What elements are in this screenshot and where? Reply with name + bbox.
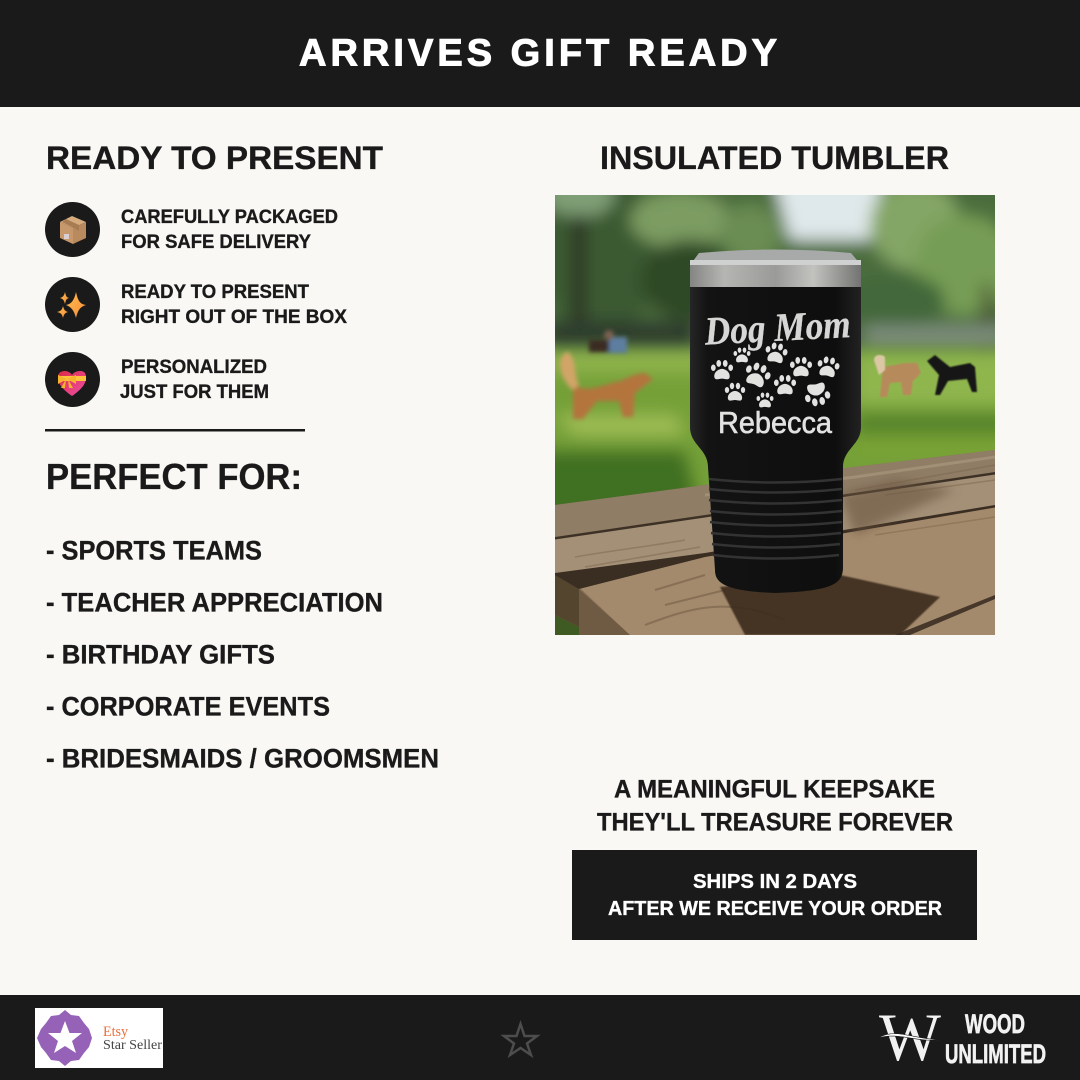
benefit: carefully packaged: [45, 202, 338, 257]
logo: wood unlimited: WOOD: [965, 1009, 1025, 1039]
callout: shipping box: [572, 850, 977, 940]
benefit: carefully packaged: CAREFULLY PACKAGED: [121, 206, 338, 228]
list: occasions: [46, 536, 439, 774]
benefit: ready to present: [45, 277, 347, 332]
park background: [555, 195, 995, 505]
benefit: personalized: PERSONALIZED: [121, 356, 267, 378]
badge: etsy star seller: [35, 1008, 163, 1068]
icon: sparkles: [57, 292, 86, 318]
benefit: carefully packaged: FOR SAFE DELIVERY: [121, 231, 311, 253]
tumbler: [690, 250, 861, 593]
list: occasions: - CORPORATE EVENTS: [46, 692, 330, 722]
callout: keepsake message: A MEANINGFUL KEEPSAKE: [614, 776, 935, 804]
engraving: dog mom: Dog Mom: [703, 301, 852, 354]
benefit: ready to present: RIGHT OUT OF THE BOX: [121, 306, 347, 328]
callout: shipping box: AFTER WE RECEIVE YOUR ORDER: [608, 898, 943, 920]
icon: package: [60, 216, 86, 244]
footer bar: [0, 995, 1080, 1080]
callout: shipping box: SHIPS IN 2 DAYS: [693, 871, 857, 893]
icon: star outline: [504, 1024, 537, 1055]
heading: insulated tumbler: INSULATED TUMBLER: [600, 140, 949, 176]
grass: [555, 339, 995, 505]
header banner: [0, 0, 1080, 107]
tumbler body: [690, 287, 861, 593]
badge: etsy star seller: Star Seller: [103, 1038, 162, 1053]
icon: gift heart: [58, 371, 86, 396]
tumbler shadow: [720, 575, 940, 635]
list: occasions: - SPORTS TEAMS: [46, 536, 262, 566]
steel rim: [690, 265, 861, 287]
tumbler ribs: [709, 479, 842, 558]
product photo: engraved tumbler on picnic table: [555, 195, 995, 635]
logo: wood unlimited: W: [879, 999, 942, 1075]
dogs: pair in distance: [874, 355, 977, 397]
engraving: name: Rebecca: [718, 405, 833, 440]
engraving: paw prints: [711, 341, 841, 408]
benefit: personalized: JUST FOR THEM: [120, 381, 269, 403]
benefit: ready to present: READY TO PRESENT: [121, 281, 309, 303]
list: occasions: - BRIDESMAIDS / GROOMSMEN: [46, 744, 439, 774]
panel: ready to present: [45, 140, 383, 407]
benefit: personalized: [45, 352, 269, 407]
dog: golden retriever: [560, 352, 653, 419]
lid: [694, 250, 857, 260]
list: occasions: - TEACHER APPRECIATION: [46, 588, 383, 618]
table: [555, 450, 995, 635]
logo: wood unlimited: [878, 999, 1046, 1075]
callout: keepsake message: [597, 776, 953, 836]
badge: etsy star seller: Etsy: [103, 1024, 128, 1040]
heading: perfect for: PERFECT FOR:: [46, 456, 302, 497]
list: occasions: - BIRTHDAY GIFTS: [46, 640, 275, 670]
title: ARRIVES GIFT READY: [299, 32, 777, 74]
people: [589, 330, 627, 353]
panel: perfect for: [46, 456, 439, 774]
callout: keepsake message: THEY'LL TREASURE FOREVER: [597, 808, 953, 836]
heading: ready to present: READY TO PRESENT: [46, 140, 383, 176]
